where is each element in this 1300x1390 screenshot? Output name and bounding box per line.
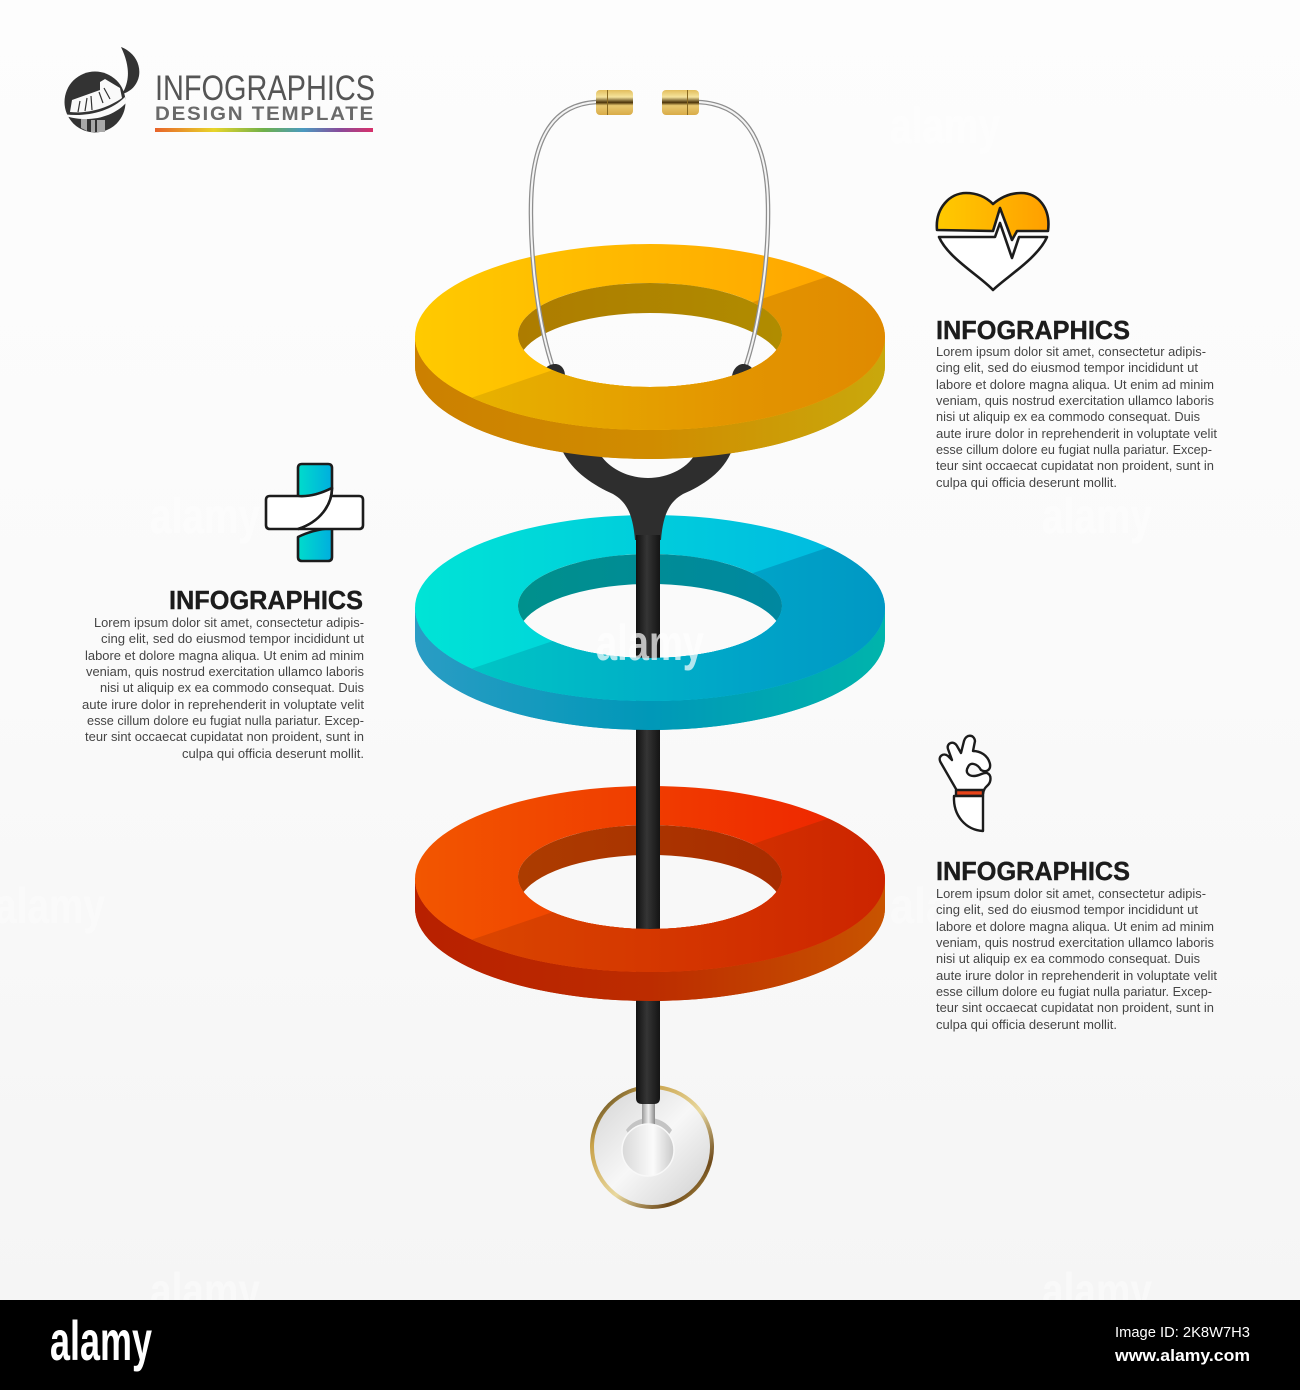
body text	[936, 887, 1218, 1032]
faint watermarks: alamy	[1042, 488, 1152, 544]
body text: aute irure dolor in reprehenderit in voluptate velit	[936, 427, 1218, 441]
yoke	[562, 450, 732, 540]
logo icon	[57, 47, 139, 132]
stethoscope	[531, 90, 768, 1209]
right black joint	[732, 364, 754, 382]
body text: teur sint occaecat cupidatat non proident, sunt in	[936, 459, 1214, 473]
ring front: red	[415, 878, 885, 1001]
image id: Image ID: 2K8W7H3	[1115, 1324, 1250, 1341]
footer logo: alamy	[50, 1309, 152, 1372]
body text: teur sint occaecat cupidatat non proident, sunt in	[936, 1001, 1214, 1015]
logo title: INFOGRAPHICS	[155, 69, 375, 108]
body text: cing elit, sed do eiusmod tempor incididunt ut	[936, 903, 1199, 917]
body text: Lorem ipsum dolor sit amet, consectetur adipis-	[936, 887, 1206, 901]
body text: labore et dolore magna aliqua. Ut enim ad minim	[936, 920, 1214, 934]
ring front: yellow	[415, 336, 885, 459]
body text: Lorem ipsum dolor sit amet, consectetur adipis-	[94, 616, 364, 630]
text block: left	[82, 585, 365, 761]
left ear tip	[596, 90, 633, 115]
icon: hand ok sign	[940, 736, 990, 831]
body text	[82, 616, 365, 761]
ring: yellow	[415, 244, 885, 459]
body text: cing elit, sed do eiusmod tempor incididunt ut	[101, 632, 365, 646]
body text: aute irure dolor in reprehenderit in voluptate velit	[936, 969, 1218, 983]
body text: culpa qui officia deserunt mollit.	[182, 747, 364, 761]
logo	[57, 47, 375, 132]
body text: Lorem ipsum dolor sit amet, consectetur adipis-	[936, 345, 1206, 359]
right ear tube	[698, 102, 768, 368]
body text: veniam, quis nostrud exercitation ullamco laboris	[936, 936, 1214, 950]
body text: teur sint occaecat cupidatat non proident, sunt in	[85, 730, 364, 744]
heading: INFOGRAPHICS	[936, 315, 1130, 345]
heading: INFOGRAPHICS	[936, 856, 1130, 886]
text block: bottom right	[936, 856, 1218, 1032]
center watermark: alamy	[596, 615, 704, 671]
icon: medical cross	[266, 464, 363, 561]
text block: top right	[936, 315, 1218, 490]
body text: labore et dolore magna aliqua. Ut enim ad minim	[936, 378, 1214, 392]
faint watermarks: ala	[890, 878, 951, 934]
logo rainbow bar	[155, 128, 373, 132]
body text: culpa qui officia deserunt mollit.	[936, 476, 1117, 490]
body text: esse cillum dolore eu fugiat nulla pariatur. Excep-	[936, 985, 1212, 999]
ring front: teal	[415, 607, 885, 730]
ring: red	[415, 786, 885, 1001]
heading: INFOGRAPHICS	[169, 585, 363, 615]
body text: nisi ut aliquip ex ea commodo consequat. Duis	[936, 410, 1200, 424]
ring: teal	[415, 515, 885, 730]
body text: veniam, quis nostrud exercitation ullamco laboris	[936, 394, 1214, 408]
faint watermarks: alamy	[150, 488, 260, 544]
left ear tube	[531, 102, 597, 368]
body text: labore et dolore magna aliqua. Ut enim ad minim	[85, 649, 364, 663]
body text: nisi ut aliquip ex ea commodo consequat. Duis	[936, 952, 1200, 966]
body text: esse cillum dolore eu fugiat nulla pariatur. Excep-	[936, 443, 1212, 457]
left black joint	[544, 364, 565, 380]
body text: cing elit, sed do eiusmod tempor incididunt ut	[936, 361, 1199, 375]
right ear tip	[662, 90, 699, 115]
footer bar	[0, 1300, 1300, 1390]
chest piece	[590, 1085, 714, 1209]
logo subtitle: DESIGN TEMPLATE	[155, 104, 375, 125]
icon: heart with pulse	[937, 193, 1048, 290]
body text: esse cillum dolore eu fugiat nulla pariatur. Excep-	[87, 714, 364, 728]
body text: nisi ut aliquip ex ea commodo consequat. Duis	[100, 681, 364, 695]
body text: culpa qui officia deserunt mollit.	[936, 1018, 1117, 1032]
body text: veniam, quis nostrud exercitation ullamco laboris	[86, 665, 364, 679]
faint watermarks: alamy	[1042, 1263, 1152, 1319]
footer url: www.alamy.com	[1114, 1346, 1250, 1365]
faint watermarks: alamy	[890, 98, 1000, 154]
faint watermarks: alamy	[150, 1263, 260, 1319]
faint watermarks	[0, 98, 1152, 1319]
body text: aute irure dolor in reprehenderit in voluptate velit	[82, 698, 365, 712]
body text	[936, 345, 1218, 490]
main tube	[636, 535, 660, 1103]
